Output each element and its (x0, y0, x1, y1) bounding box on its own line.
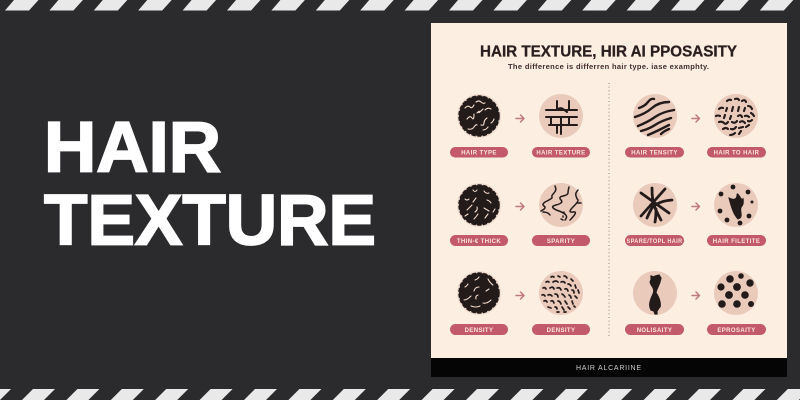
label: NOLISAITY (625, 324, 684, 335)
poster title: HAIR TEXTURE, HIR AI PPOSASITY (480, 44, 738, 60)
label: NOLISAITY: NOLISAITY (637, 328, 672, 334)
icon: hair texture (539, 94, 583, 138)
label: DENSITY: DENSITY (547, 328, 575, 334)
label: SPARITY: SPARITY (547, 239, 575, 245)
label: DENSITY: DENSITY (465, 328, 493, 334)
label: DENSITY (532, 324, 590, 335)
icon: density dark (457, 271, 501, 315)
label: HAIR TEXTURE: HAIR TEXTURE (536, 150, 586, 156)
icon: hair filletite (714, 183, 758, 227)
panel: infographic poster (431, 23, 787, 358)
icon: density fine (539, 271, 583, 315)
icon: hair tensity (633, 94, 677, 138)
label: EPROSAITY: EPROSAITY (717, 328, 756, 334)
label: THIN-C THICK (450, 235, 508, 246)
label: HAIR TEXTURE (532, 147, 590, 158)
label: SPARITY (532, 235, 590, 246)
label: THIN-C THICK: THIN-€ THICK (457, 239, 501, 245)
label: HAIR TENSITY (625, 147, 684, 158)
main heading: HAIR TEXTURE (44, 108, 376, 260)
label: EPROSAITY (707, 324, 766, 335)
icon: spare/topl hair (633, 183, 677, 227)
main heading: HAIR TEXTURE: HAIR (44, 108, 221, 188)
icon: sparity (539, 183, 583, 227)
icon: eprosaity dots (714, 271, 758, 315)
label: HAIR TYPE: HAIR TYPE (461, 150, 497, 156)
arrow (692, 292, 700, 299)
footer bar (431, 358, 787, 377)
arrow (692, 115, 700, 122)
label: DENSITY (450, 324, 508, 335)
poster subtitle: The difference is differren hair type. iase examphty. (508, 62, 709, 71)
icon: hair to hair (714, 94, 758, 138)
arrow (516, 292, 524, 299)
top hazard stripe band (5, 0, 793, 10)
label: HAIR FILETITE (707, 235, 766, 246)
arrow (516, 115, 524, 122)
arrow (516, 203, 524, 210)
label: HAIR TO HAIR (707, 147, 766, 158)
bottom hazard stripe band (0, 389, 800, 400)
main heading: HAIR TEXTURE: TEXTURE (44, 182, 376, 260)
label: SPARE/TOPL HAIR (625, 235, 684, 246)
label: HAIR TO HAIR: HAIR TO HAIR (714, 150, 760, 156)
label: SPARE/TOPL HAIR: SPARE/TOPL HAIR (626, 239, 683, 245)
icon: hair silhouette (633, 271, 677, 315)
icon: hair type (457, 94, 501, 138)
arrow (692, 203, 700, 210)
dotted centre divider (608, 83, 610, 337)
icon: thin thick (457, 183, 501, 227)
label: HAIR FILETITE: HAIR FILETITE (713, 239, 760, 245)
label: HAIR TENSITY: HAIR TENSITY (631, 150, 678, 156)
label: HAIR TYPE (450, 147, 508, 158)
footer bar: HAIR ALCARIINE (576, 365, 641, 372)
